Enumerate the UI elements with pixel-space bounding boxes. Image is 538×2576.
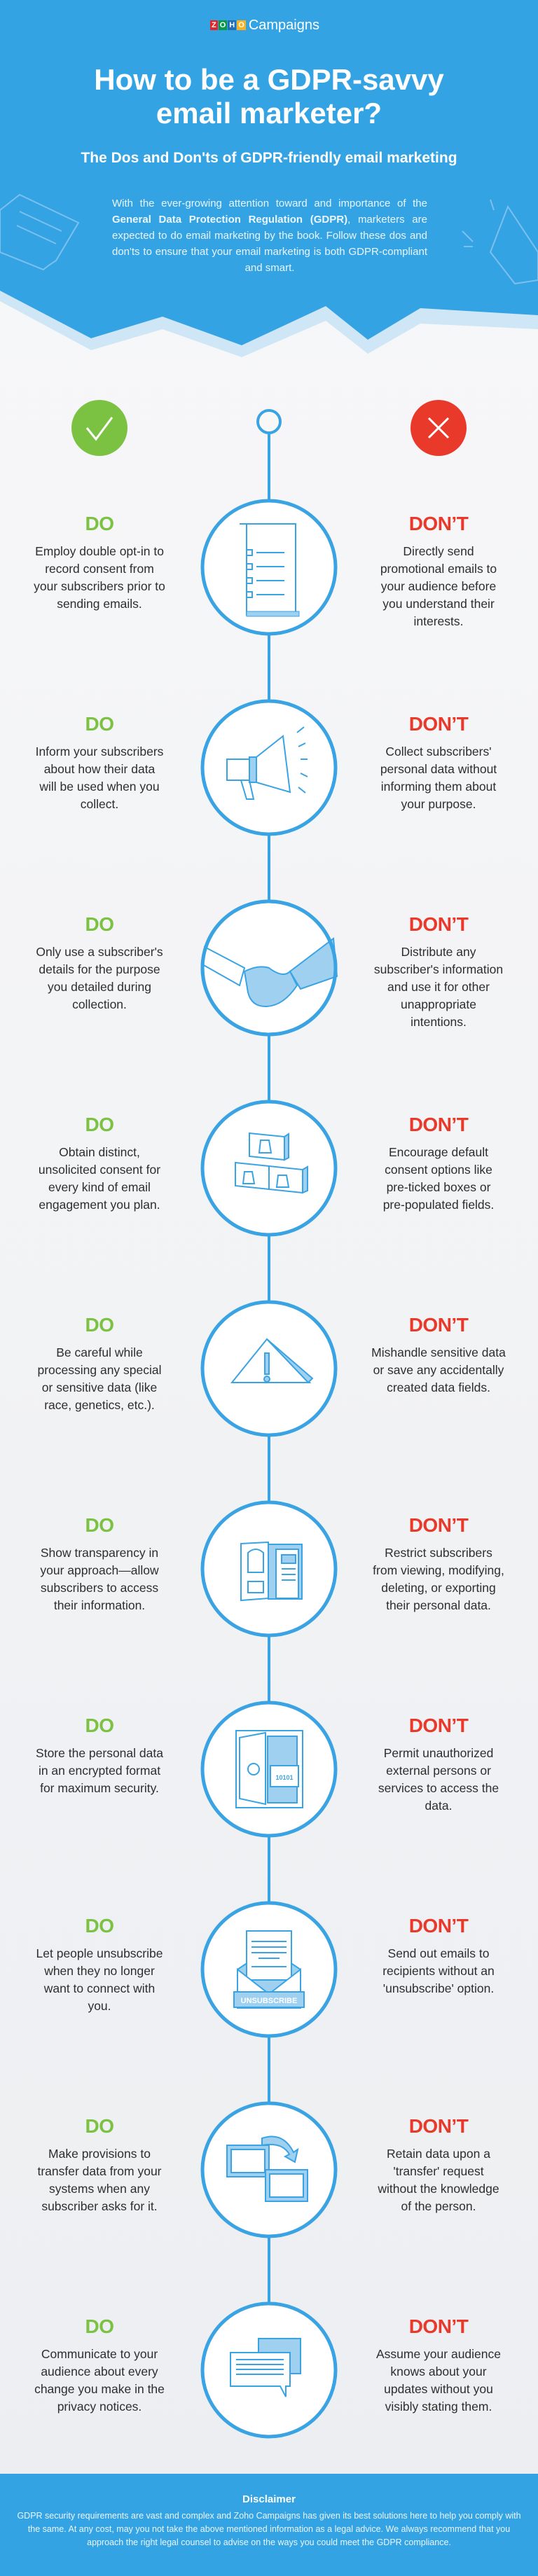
row 10: updates without you <box>384 2382 493 2396</box>
logo: O <box>220 21 226 29</box>
row 1: record consent from <box>45 562 154 576</box>
row 10: DON’T <box>409 2315 468 2337</box>
icon: warning <box>200 1300 338 1437</box>
subtitle: The Dos and Don'ts of GDPR-friendly email marketing <box>81 150 457 166</box>
row 8: DON’T <box>409 1915 468 1937</box>
row 4: Encourage default <box>389 1145 488 1159</box>
row 10: change you make in the <box>34 2382 165 2396</box>
row 4: pre-populated fields. <box>383 1198 494 1212</box>
row 10: Assume your audience <box>376 2347 501 2361</box>
row 9: transfer data from your <box>37 2164 162 2178</box>
row 5: or sensitive data (like <box>42 1380 157 1394</box>
row 9: Retain data upon a <box>387 2147 490 2161</box>
row 6 <box>40 1500 504 1637</box>
row 9: Make provisions to <box>48 2147 151 2161</box>
row 10: privacy notices. <box>57 2400 142 2414</box>
icon: safe <box>200 1701 338 1838</box>
row 7: data. <box>425 1799 452 1813</box>
row 10: Communicate to your <box>41 2347 158 2361</box>
row 1: promotional emails to <box>380 562 497 576</box>
row 4: DO <box>85 1114 113 1135</box>
row 6: your approach—allow <box>40 1563 159 1577</box>
disclaimer <box>0 2474 538 2576</box>
row 3: DON’T <box>409 913 468 935</box>
row 5: or save any accidentally <box>373 1363 504 1377</box>
row 4: consent options like <box>385 1163 492 1177</box>
row 9: DO <box>85 2115 113 2137</box>
row 4: pre-ticked boxes or <box>387 1180 490 1194</box>
row 4: Obtain distinct, <box>59 1145 140 1159</box>
row 8: 'unsubscribe' option. <box>383 1981 494 1995</box>
row 3: and use it for other <box>387 980 490 994</box>
row 5: DO <box>85 1314 113 1336</box>
row 7: in an encrypted format <box>39 1764 160 1778</box>
logo <box>210 17 319 32</box>
row 1 <box>34 499 497 636</box>
row 1: Directly send <box>403 544 474 558</box>
row 8: want to connect with <box>44 1981 155 1995</box>
row 10: audience about every <box>41 2364 158 2378</box>
row 8 <box>36 1901 495 2038</box>
row 10: visibly stating them. <box>385 2400 492 2414</box>
row 9: of the person. <box>401 2199 476 2213</box>
row 4: unsolicited consent for <box>39 1163 160 1177</box>
row 7: services to access the <box>378 1781 499 1795</box>
row 6: their information. <box>54 1598 145 1612</box>
intro paragraph: With the ever-growing attention toward and importance of the General Data Protection Regulation (GDPR), marketers are expected to do email marketing by the book. Follow these dos and don'ts to ensure that your email marketing is both GDPR-compliant and smart. <box>112 198 427 274</box>
row 9 <box>37 2101 499 2238</box>
row 5: processing any special <box>37 1363 162 1377</box>
row 2: DO <box>85 713 113 735</box>
row 1: interests. <box>413 614 464 628</box>
timeline line <box>268 433 270 2373</box>
row 2: informing them about <box>381 780 496 794</box>
title: email marketer? <box>156 97 382 130</box>
row 6: subscribers to access <box>41 1581 158 1595</box>
row 5: created data fields. <box>387 1380 490 1394</box>
row 1: sending emails. <box>57 597 142 611</box>
icon: handshake <box>200 899 338 1037</box>
row 3: Distribute any <box>401 945 476 959</box>
icon: monitors transfer <box>200 2101 338 2238</box>
row 7: Permit unauthorized <box>384 1746 493 1760</box>
row 5: race, genetics, etc.). <box>44 1398 155 1412</box>
row 10: DO <box>85 2315 113 2337</box>
row 6: DO <box>85 1514 113 1536</box>
row 9: subscriber asks for it. <box>41 2199 158 2213</box>
title: How to be a GDPR-savvy <box>94 63 444 96</box>
icon: safe: 10101 <box>275 1774 294 1781</box>
logo: Z <box>212 21 216 29</box>
row 1: your audience before <box>381 579 496 593</box>
row 6: deleting, or exporting <box>381 1581 496 1595</box>
row 6: their personal data. <box>386 1598 491 1612</box>
row 2: Inform your subscribers <box>36 745 163 759</box>
row 1: DO <box>85 513 113 534</box>
row 8: recipients without an <box>382 1964 495 1978</box>
row 4: DON’T <box>409 1114 468 1135</box>
row 1: Employ double opt-in to <box>35 544 164 558</box>
row 9: without the knowledge <box>378 2182 499 2196</box>
row 7: DON’T <box>409 1715 468 1736</box>
row 7: Store the personal data <box>36 1746 163 1760</box>
row 2 <box>36 699 497 836</box>
row 2: about how their data <box>44 762 155 776</box>
row 8: when they no longer <box>44 1964 155 1978</box>
icon: checklist <box>200 499 338 636</box>
row 7 <box>36 1701 499 1838</box>
row 2: your purpose. <box>401 797 476 811</box>
title <box>94 63 444 130</box>
row 8: Let people unsubscribe <box>36 1946 163 1960</box>
row 9: systems when any <box>49 2182 150 2196</box>
row 4: engagement you plan. <box>39 1198 160 1212</box>
row 3: you detailed during <box>48 980 151 994</box>
row 4 <box>39 1100 494 1237</box>
row 3 <box>36 899 503 1037</box>
disclaimer: GDPR security requirements are vast and complex and Zoho Campaigns has given its best solutions here to help you comply with the same. At any cost, may you not take the above mentioned information as a legal advice. We always recommend that you approach the right legal counsel to advise on the ways you could meet the GDPR compliance. <box>17 2511 521 2547</box>
row 2: collect. <box>81 797 118 811</box>
logo: Campaigns <box>249 17 319 32</box>
row 7: external persons or <box>386 1764 491 1778</box>
row 8: DO <box>85 1915 113 1937</box>
header background <box>0 0 538 357</box>
row 6: Restrict subscribers <box>385 1546 492 1560</box>
icon: do check <box>71 400 127 456</box>
row 3: unappropriate <box>401 997 476 1011</box>
row 10 <box>34 2301 501 2439</box>
row 10: knows about your <box>390 2364 487 2378</box>
row 5 <box>37 1300 506 1437</box>
icon: megaphone <box>200 699 338 836</box>
row 7: DO <box>85 1715 113 1736</box>
row 7: for maximum security. <box>40 1781 159 1795</box>
row 3: DO <box>85 913 113 935</box>
row 6: Show transparency in <box>41 1546 158 1560</box>
row 9: DON’T <box>409 2115 468 2137</box>
row 8: you. <box>88 1999 111 2013</box>
icon: chat bubbles <box>200 2301 338 2439</box>
row 8: Send out emails to <box>388 1946 489 1960</box>
row 1: you understand their <box>382 597 495 611</box>
icon: dont cross <box>411 400 467 456</box>
row 5: Be careful while <box>56 1345 143 1359</box>
row 2: Collect subscribers' <box>385 745 492 759</box>
row 3: Only use a subscriber's <box>36 945 163 959</box>
icon: open door <box>200 1500 338 1637</box>
row 3: intentions. <box>411 1015 467 1029</box>
row 3: collection. <box>72 997 127 1011</box>
icon: timeline start ring <box>256 409 282 434</box>
row 2: DON’T <box>409 713 468 735</box>
row 6: from viewing, modifying, <box>373 1563 504 1577</box>
row 6: DON’T <box>409 1514 468 1536</box>
row 3: subscriber's information <box>374 962 503 976</box>
icon: boxes <box>200 1100 338 1237</box>
row 3: details for the purpose <box>39 962 160 976</box>
icon: unsubscribe envelope: UNSUBSCRIBE <box>241 1997 297 2005</box>
row 1: your subscribers prior to <box>34 579 165 593</box>
row 5: DON’T <box>409 1314 468 1336</box>
row 9: 'transfer' request <box>393 2164 484 2178</box>
row 4: every kind of email <box>48 1180 151 1194</box>
logo: O <box>238 21 244 29</box>
row 2: personal data without <box>380 762 497 776</box>
logo: H <box>229 21 235 29</box>
row 5: Mishandle sensitive data <box>371 1345 506 1359</box>
disclaimer: Disclaimer <box>242 2493 296 2505</box>
row 2: will be used when you <box>39 780 160 794</box>
row 1: DON’T <box>409 513 468 534</box>
icon: unsubscribe envelope <box>200 1901 338 2038</box>
